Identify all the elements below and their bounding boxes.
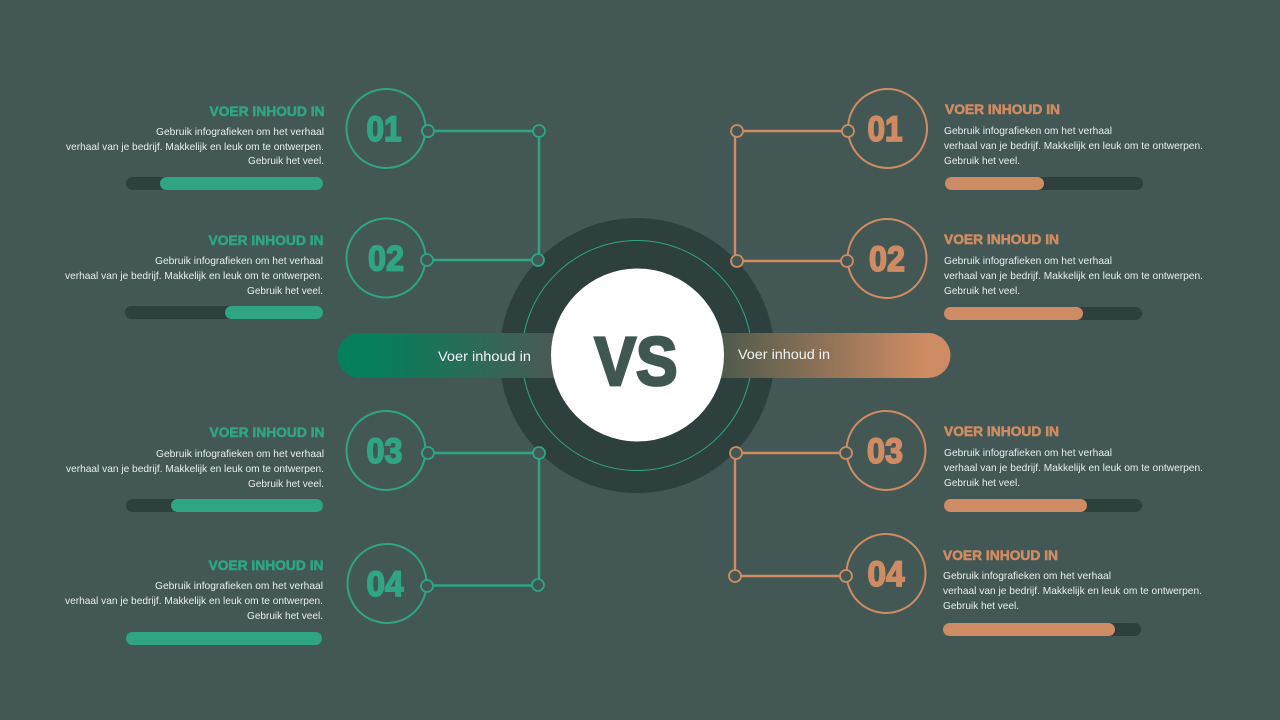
right item 04: verhaal van je bedrijf. Makkelijk en leuk om te ontwerpen. <box>943 585 1202 597</box>
connector node <box>422 125 434 137</box>
left item 01: Gebruik het veel. <box>248 155 324 167</box>
left item 02: Gebruik infografieken om het verhaal <box>155 255 323 267</box>
left item 02: 02 <box>368 240 404 278</box>
left item 04: VOER INHOUD IN <box>208 558 324 573</box>
right item 04: VOER INHOUD IN <box>943 548 1058 563</box>
left item 02: VOER INHOUD IN <box>208 233 324 248</box>
left banner: Voer inhoud in <box>438 349 531 364</box>
right item 01: Gebruik het veel. <box>944 155 1020 167</box>
right item 01: Gebruik infografieken om het verhaal <box>944 125 1112 137</box>
connector node <box>842 125 854 137</box>
left item 03: VOER INHOUD IN <box>210 425 324 440</box>
right item 02: Gebruik infografieken om het verhaal <box>944 255 1112 267</box>
connector node <box>840 447 852 459</box>
left item 04: Gebruik infografieken om het verhaal <box>155 580 323 592</box>
left banner <box>338 333 560 378</box>
left item 04: verhaal van je bedrijf. Makkelijk en leuk om te ontwerpen. <box>65 595 323 607</box>
white VS circle: VS <box>594 323 678 400</box>
left item 01: VOER INHOUD IN <box>210 104 324 119</box>
right item 01: verhaal van je bedrijf. Makkelijk en leuk om te ontwerpen. <box>944 140 1203 152</box>
left item 01: verhaal van je bedrijf. Makkelijk en leuk om te ontwerpen. <box>66 141 324 153</box>
left item 02: verhaal van je bedrijf. Makkelijk en leuk om te ontwerpen. <box>65 270 323 282</box>
right item 01: 01 <box>868 110 902 149</box>
right banner <box>715 333 950 378</box>
right item 02: 02 <box>869 240 905 279</box>
connector node <box>841 255 853 267</box>
left item 02 <box>65 218 433 319</box>
left item 03: Gebruik het veel. <box>248 478 324 490</box>
left item 03 <box>66 411 434 512</box>
connector node <box>421 580 433 592</box>
left item 03: verhaal van je bedrijf. Makkelijk en leuk om te ontwerpen. <box>66 463 324 475</box>
right item 03: VOER INHOUD IN <box>944 424 1059 439</box>
right item 03: 03 <box>867 432 903 471</box>
connector node <box>840 570 852 582</box>
right item 04 <box>840 534 1202 636</box>
connector node <box>422 447 434 459</box>
right item 01 <box>842 89 1203 190</box>
left item 01 <box>66 89 434 190</box>
right item 03: Gebruik infografieken om het verhaal <box>944 447 1112 459</box>
right item 02 <box>841 219 1203 320</box>
left item 04: Gebruik het veel. <box>247 610 323 622</box>
left item 04: 04 <box>366 565 404 604</box>
connector node <box>421 254 433 266</box>
right item 04: Gebruik het veel. <box>943 600 1019 612</box>
left item 01: 01 <box>366 110 402 149</box>
left item 03: Gebruik infografieken om het verhaal <box>156 448 324 460</box>
right item 02: Gebruik het veel. <box>944 285 1020 297</box>
right item 01: VOER INHOUD IN <box>945 102 1060 117</box>
left item 01: Gebruik infografieken om het verhaal <box>156 126 324 138</box>
left item 04 <box>65 544 433 645</box>
right item 04: Gebruik infografieken om het verhaal <box>943 570 1111 582</box>
white VS circle <box>551 268 724 442</box>
right connector lines <box>729 125 842 582</box>
left item 03: 03 <box>366 432 402 471</box>
central VS badge rings <box>500 218 774 493</box>
right item 03: Gebruik het veel. <box>944 477 1020 489</box>
right item 02: VOER INHOUD IN <box>944 232 1059 247</box>
right item 02: verhaal van je bedrijf. Makkelijk en leuk om te ontwerpen. <box>944 270 1203 282</box>
right item 03 <box>840 411 1203 512</box>
right item 03: verhaal van je bedrijf. Makkelijk en leuk om te ontwerpen. <box>944 462 1203 474</box>
right item 04: 04 <box>868 555 905 594</box>
right banner: Voer inhoud in <box>738 347 830 362</box>
left connector lines <box>422 125 545 591</box>
left item 02: Gebruik het veel. <box>247 285 323 297</box>
